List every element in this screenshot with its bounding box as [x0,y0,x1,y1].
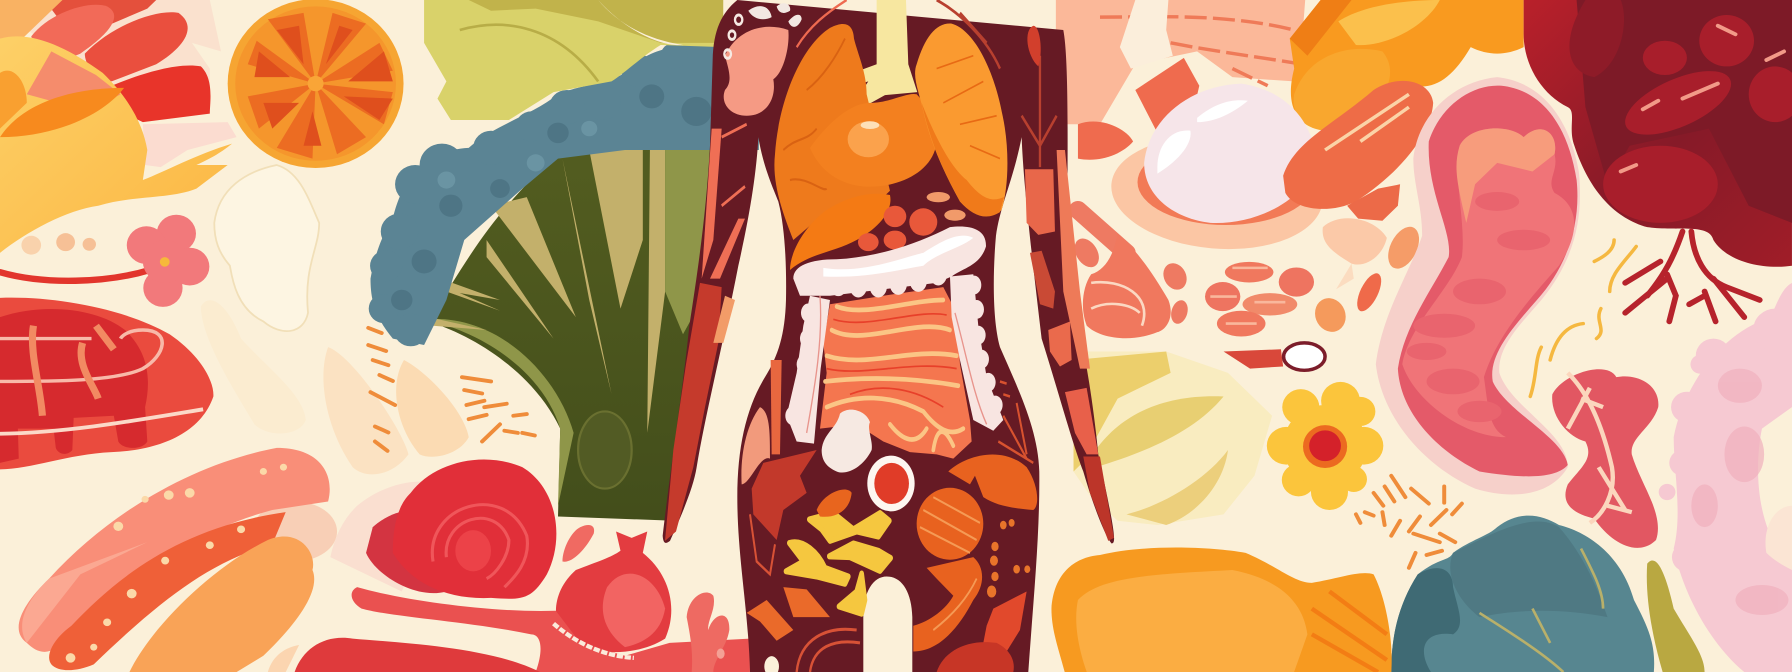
icon: salmon strips [19,448,330,672]
small red organs [858,192,966,251]
icon: citrus slice [228,0,404,168]
icon: cream cauliflower [214,165,319,331]
icon: peach disc [252,501,337,561]
icon: yellow squiggles [1530,240,1636,396]
hip left strip shapes [741,360,782,484]
icon: coral sprig behind left leg [687,592,729,672]
icon: bacon ribbons [268,587,750,672]
icon: small seed and stem [1224,343,1325,370]
icon: red sausages [27,0,221,122]
icon: yellow fruit with leaf [0,0,232,253]
right arm details [937,0,1114,541]
lower white spot [764,656,779,672]
orange stripes [920,497,980,630]
icon: sliced beet [330,459,556,599]
panel: left foods [0,0,759,672]
small intestine [820,287,972,459]
icon: stomach shape [1376,77,1580,494]
icon: dark red organ cluster [1524,0,1792,267]
icon: cream bone shape [201,300,306,433]
icon: orange squash petals [1290,0,1524,131]
right lung [915,23,1007,217]
icon: pomegranate [556,525,671,652]
icon: egg on plate [1106,84,1327,257]
icon: marbled meat [1552,369,1658,548]
icon: pink flower with stem [0,215,209,307]
icon: rice dashes [1356,476,1462,568]
lower left leaves [747,587,830,641]
icon: pink ham slice [143,122,237,167]
icon: pale cabbage [1074,351,1272,525]
round organ [867,456,915,511]
trachea [847,0,917,107]
icon: yellow-green cabbage [424,0,723,120]
icon: pink intestine [1659,283,1792,672]
orange fish shapes [913,454,1037,651]
heart and liver [810,94,935,187]
left arm details [665,0,847,541]
large intestine [785,226,1003,444]
left lung [774,24,890,240]
icon: teal cabbage [1391,516,1654,672]
right hip twig [998,381,1033,463]
icon: almond slices [323,347,469,474]
icon: bacon slab [1056,0,1305,160]
lower orange organ [790,194,890,270]
red leaf [750,450,817,574]
orange mushroom cap [817,490,852,517]
panel: right foods [1051,0,1792,672]
yellow mushrooms [786,513,891,614]
icon: organ roots [1625,231,1760,321]
icon: shrimp and kidney beans group [1070,210,1425,338]
icon: broccoli stalk and florets [369,43,759,521]
icon: orange squash bottom [1051,548,1392,672]
lower right leaves [937,591,1027,672]
icon: coral kidney bean [1283,81,1433,265]
orange beads [987,519,1030,597]
icon: red steak [0,298,213,469]
icon: orange seed dashes [368,328,535,451]
bladder [822,410,872,473]
lower coils [797,629,860,672]
icon: peach dots [21,233,96,255]
icon: green leaf stem [1647,560,1705,672]
body silhouette [663,0,1114,672]
panel: human body figure [663,0,1114,672]
icon: yellow flower [1267,382,1383,510]
